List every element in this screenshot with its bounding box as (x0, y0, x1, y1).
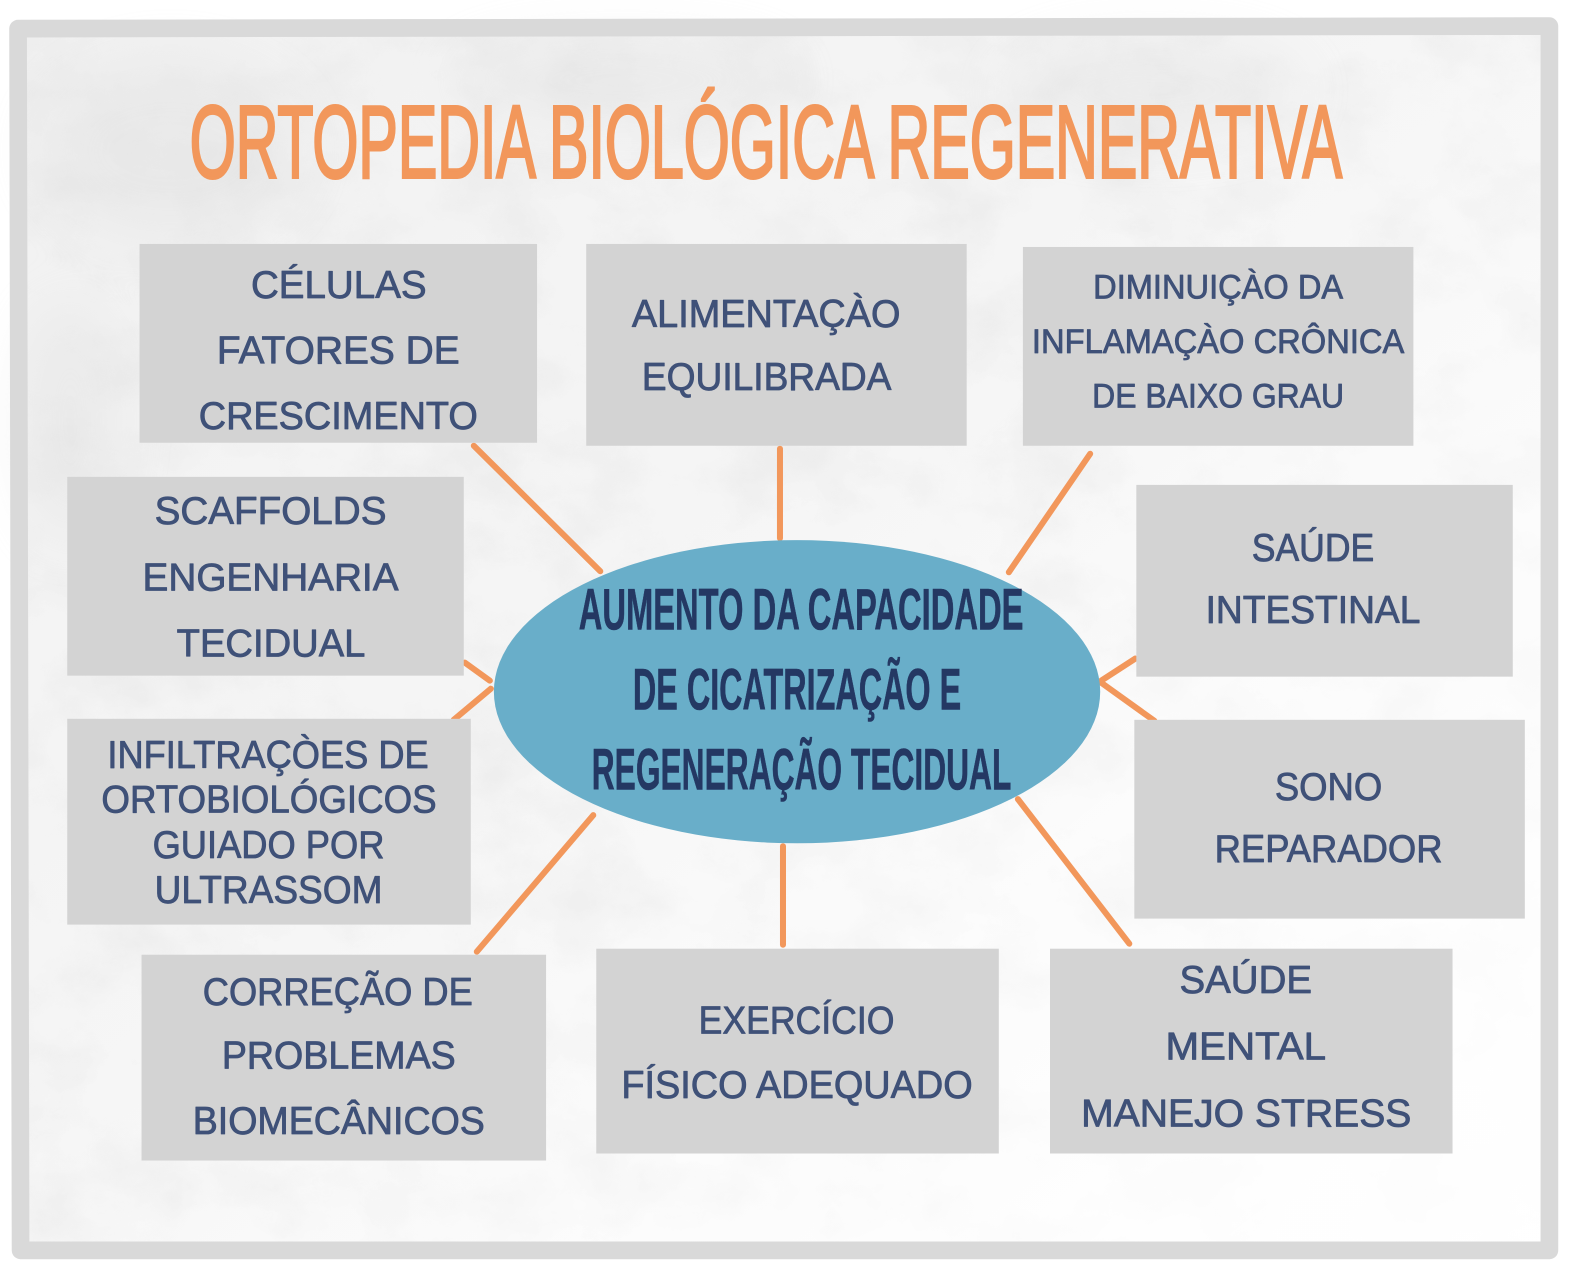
panel: scaffolds: SCAFFOLDS (155, 490, 386, 533)
panel: alimentação: EQUILIBRADA (642, 356, 892, 399)
panel: infiltrações: ULTRASSOM (155, 869, 382, 912)
panel: correção: CORREÇÃO DE (203, 971, 473, 1014)
panel: sono: REPARADOR (1215, 828, 1442, 871)
panel: saúde intestinal (1136, 485, 1513, 677)
panel: alimentação: ALIMENTAÇÀO (632, 293, 900, 336)
panel: células (140, 244, 537, 443)
panel: sono (1134, 720, 1525, 919)
panel: saúde mental: SAÚDE (1179, 959, 1312, 1002)
panel: inflamação: DE BAIXO GRAU (1092, 378, 1344, 416)
panel: correção: BIOMECÂNICOS (193, 1100, 485, 1143)
panel: infiltrações: GUIADO POR (153, 824, 384, 867)
panel: exercício: FÍSICO ADEQUADO (621, 1064, 973, 1107)
panel: saúde mental: MENTAL (1165, 1026, 1326, 1069)
panel: correção: PROBLEMAS (222, 1035, 456, 1078)
panel: sono: SONO (1275, 766, 1382, 809)
central text: DE CICATRIZAÇÃO E (633, 657, 961, 722)
central text (579, 577, 1023, 803)
panel: scaffolds: TECIDUAL (177, 623, 365, 666)
panel: alimentação (586, 244, 967, 446)
central text: AUMENTO DA CAPACIDADE (579, 577, 1023, 642)
panel: scaffolds: ENGENHARIA (143, 556, 399, 599)
panel: inflamação (1023, 247, 1413, 446)
central text: REGENERAÇÃO TECIDUAL (592, 738, 1011, 803)
panel: saúde mental (1050, 949, 1453, 1154)
connector lines (454, 446, 1154, 952)
panel: exercício (596, 949, 999, 1154)
panel: células: CRESCIMENTO (199, 395, 478, 438)
panel: infiltrações (67, 719, 471, 925)
panel: células: FATORES DE (217, 329, 460, 372)
panel: infiltrações: INFILTRAÇÒES DE (107, 734, 429, 777)
panel: scaffolds (67, 477, 464, 676)
panel: correção (142, 955, 546, 1161)
panel: saúde intestinal: SAÚDE (1252, 527, 1374, 570)
panel: saúde mental: MANEJO STRESS (1081, 1092, 1411, 1135)
central ellipse (494, 540, 1100, 843)
panel: células: CÉLULAS (251, 264, 427, 307)
panel: infiltrações: ORTOBIOLÓGICOS (101, 779, 437, 822)
panel: inflamação: INFLAMAÇÀO CRÔNICA (1032, 323, 1405, 361)
panel: inflamação: DIMINUIÇÀO DA (1093, 269, 1343, 307)
panel: saúde intestinal: INTESTINAL (1206, 589, 1420, 632)
panel: exercício: EXERCÍCIO (699, 1000, 894, 1043)
